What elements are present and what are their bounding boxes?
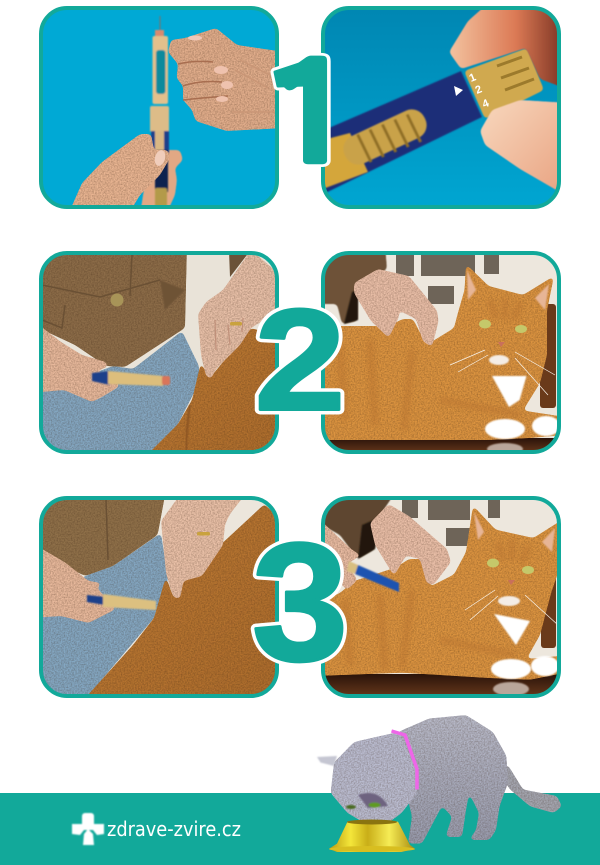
left hand	[43, 328, 118, 402]
dial numbers: 2	[474, 83, 484, 97]
cat ears	[317, 747, 392, 769]
panel: step 2, pen and dog skin fold	[43, 255, 275, 450]
jeans	[43, 535, 168, 694]
panel border: step 1 right	[323, 8, 559, 207]
icon: dose pointer	[454, 86, 463, 96]
orange cat	[315, 264, 565, 440]
icon: tan grip	[325, 108, 428, 189]
panel border: step 3 right	[323, 498, 559, 696]
right hand	[198, 255, 275, 378]
step number 3: 3	[252, 509, 348, 696]
dog back	[152, 328, 275, 450]
jeans	[43, 332, 199, 450]
step number 1: 1	[256, 46, 366, 183]
hand	[354, 269, 439, 347]
panel: step 3, needle into dog	[43, 500, 275, 694]
table	[321, 674, 561, 698]
dial numbers: 1	[468, 71, 478, 85]
panel border: step 3 left	[41, 498, 277, 696]
wedding ring	[197, 532, 210, 536]
jacket	[43, 500, 164, 576]
right hand	[161, 500, 241, 598]
dial numbers	[469, 74, 489, 107]
window	[402, 500, 500, 546]
chair	[540, 304, 556, 408]
sleeve	[315, 490, 397, 559]
icon: injection pen upright	[150, 16, 169, 207]
footer band	[0, 793, 600, 865]
panel: step 2, cat skin fold	[325, 255, 557, 450]
jacket	[43, 255, 187, 367]
hand	[370, 504, 451, 585]
gold bowl	[329, 820, 415, 852]
window	[396, 254, 499, 304]
step number 3: 3	[252, 509, 348, 696]
whiskers	[465, 590, 558, 625]
cat face	[346, 793, 388, 809]
chair	[541, 548, 556, 648]
icon: blue pen	[347, 561, 399, 592]
jacket button	[110, 294, 124, 306]
sleeve	[229, 255, 247, 277]
logo text: zdrave-zvire.cz	[107, 817, 241, 841]
icon: dose dial	[464, 48, 544, 119]
paw reflections	[493, 682, 529, 696]
icon: navy pen body	[315, 71, 482, 198]
panel: step 1, pen held in two hands	[43, 10, 275, 205]
cat collar	[392, 731, 417, 790]
icon: lower hand and thumb	[72, 134, 170, 205]
panel border: step 2 right	[323, 253, 559, 452]
table	[330, 438, 554, 450]
left fingers	[315, 515, 361, 590]
wedding ring	[230, 322, 242, 326]
cat body	[398, 715, 508, 844]
panel: step 1, dial close-up	[325, 10, 557, 205]
step number 1: 1	[256, 46, 366, 183]
left hand	[43, 550, 114, 622]
panel border: step 1 left	[41, 8, 277, 207]
icon: pen	[87, 594, 156, 610]
panel: step 3, needle into cat	[315, 490, 565, 698]
cat head	[331, 732, 418, 825]
step number 2: 2	[255, 279, 345, 440]
orange cat	[315, 506, 565, 680]
lower hand fingers behind pen	[140, 149, 183, 205]
icon: lower finger	[480, 100, 557, 190]
cat tail	[503, 762, 562, 813]
whiskers	[450, 350, 555, 395]
cat tongue	[359, 820, 369, 826]
illustration: grey cat eating from gold bowl	[317, 715, 562, 852]
logo icon: cross with animals	[72, 813, 104, 845]
panel border: step 2 left	[41, 253, 277, 452]
sleeve	[325, 255, 388, 325]
icon: upper finger	[449, 10, 557, 86]
dial numbers: 4	[481, 97, 492, 111]
dog back	[89, 506, 275, 694]
step number 2: 2	[255, 279, 345, 440]
paw reflections	[486, 442, 524, 450]
icon: upper hand	[168, 28, 285, 131]
icon: pen	[92, 371, 170, 386]
